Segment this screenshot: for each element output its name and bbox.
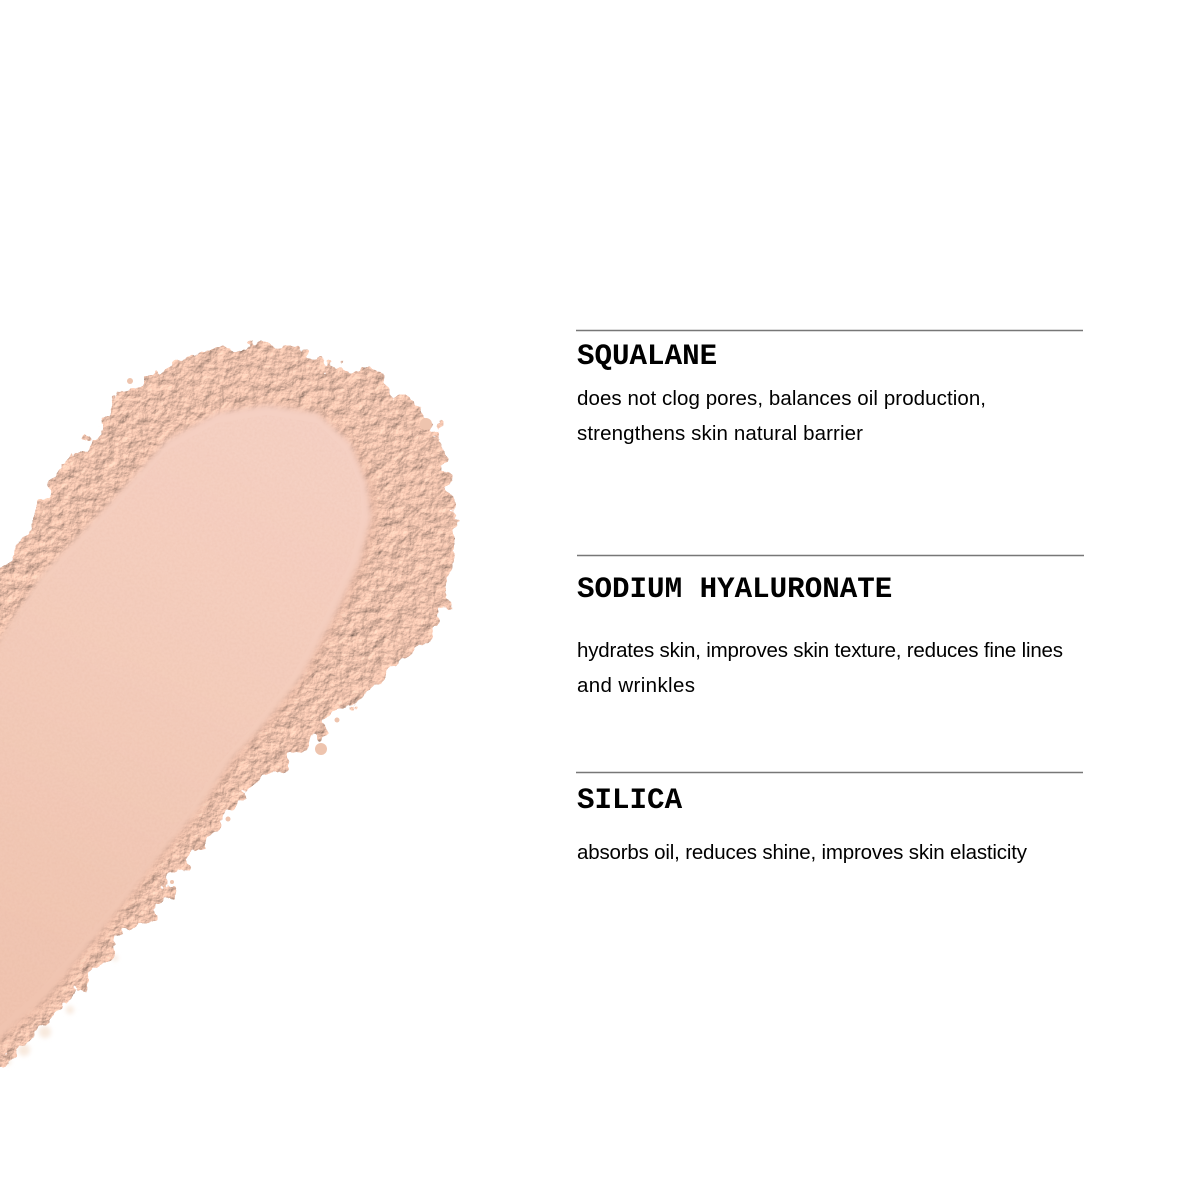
ingredient: silica [576, 772, 1083, 864]
description: sodium hyaluronate: and wrinkles [577, 674, 695, 697]
ingredient: sodium hyaluronate [577, 556, 1084, 697]
stray powder specks [127, 378, 432, 884]
heading: sodium hyaluronate: SODIUM HYALURONATE [577, 573, 892, 606]
loose powder rim [0, 345, 457, 1084]
description: silica: absorbs oil, reduces shine, improves skin elasticity [577, 841, 1028, 864]
description: sodium hyaluronate: hydrates skin, improves skin texture, reduces fine lines [577, 639, 1063, 662]
pressed powder fine grain [0, 415, 362, 1045]
powder swatch [0, 345, 457, 1084]
pressed powder surface [0, 405, 371, 1055]
heading: silica: SILICA [577, 784, 683, 817]
description: squalane: strengthens skin natural barrier [577, 422, 863, 445]
ingredient: squalane [576, 330, 1083, 445]
cream dust at the tip [5, 955, 118, 1065]
heading: squalane: SQUALANE [577, 340, 717, 373]
description: squalane: does not clog pores, balances oil production, [577, 387, 986, 410]
pressed powder shadow [0, 404, 377, 1060]
